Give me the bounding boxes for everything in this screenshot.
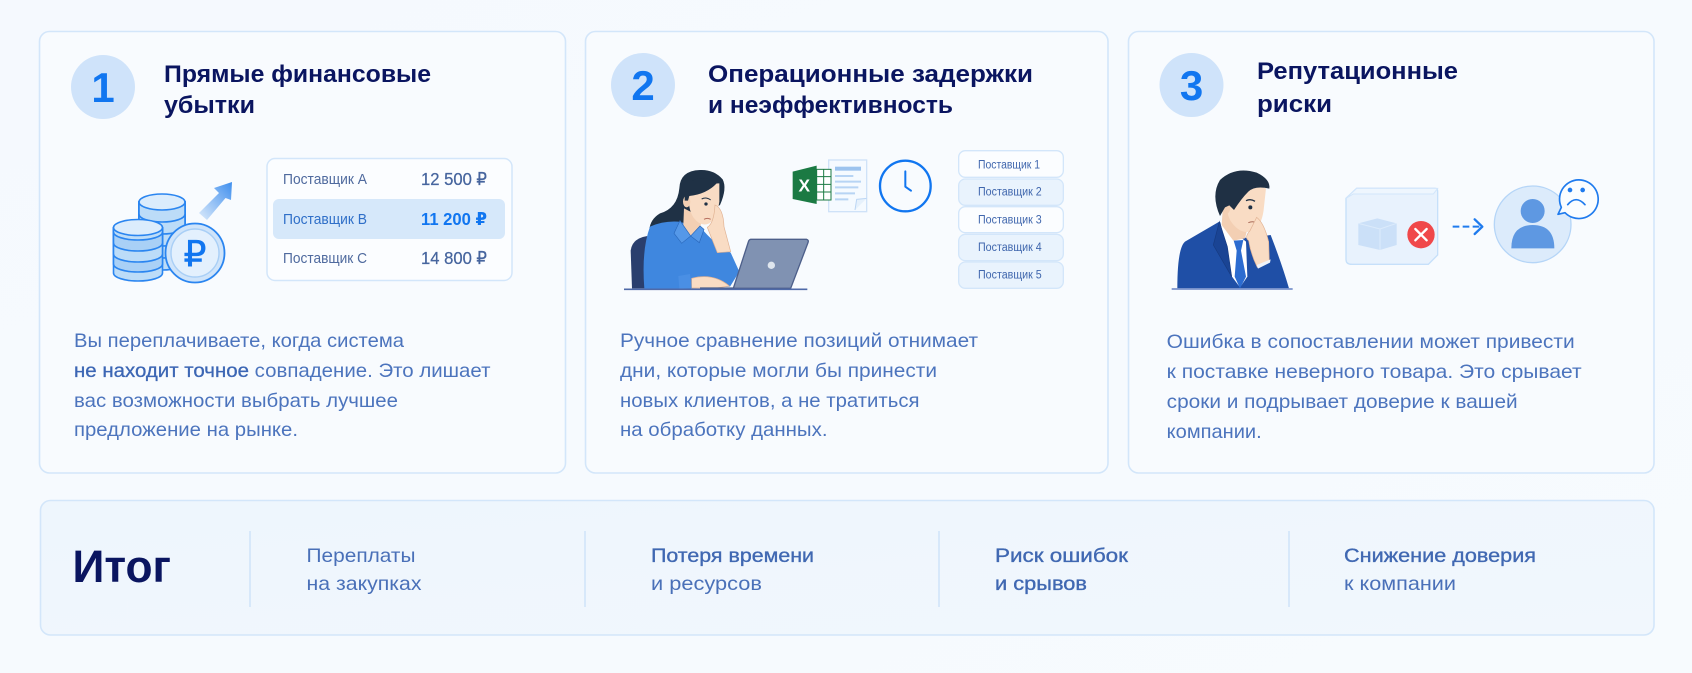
arrow: dashed to customer: [1453, 219, 1482, 234]
body text: operational delays: дни, которые могли бы принести: [620, 360, 937, 382]
summary heading: Итог: [72, 541, 171, 592]
heading: reputational risks: Репутационные: [1257, 58, 1458, 85]
supplier list: Поставщик 4: [978, 240, 1042, 254]
heading: reputational risks: [1257, 58, 1458, 118]
price comparison table: Поставщик A: [283, 172, 367, 188]
summary item: lost time: и ресурсов: [651, 573, 762, 595]
body text: operational delays: на обработку данных.: [620, 419, 828, 441]
price comparison table: Поставщик C: [283, 251, 367, 267]
body text: financial losses: не находит точное совпадение. Это лишает: [74, 360, 491, 382]
supplier list: Поставщик 2: [978, 185, 1042, 199]
icon: spreadsheet and document: X: [799, 175, 811, 195]
icon: coin stacks with ruble and arrow: [114, 182, 232, 282]
supplier list: Поставщик 3: [978, 212, 1042, 226]
body text: operational delays: новых клиентов, а не тратиться: [620, 390, 920, 412]
body text: reputational risks: сроки и подрывает доверие к вашей: [1167, 391, 1518, 413]
number badge 3: 3: [1180, 62, 1203, 109]
number badge 2: [611, 53, 675, 117]
number badge 1: 1: [91, 64, 115, 111]
price comparison table: 11 200 ₽: [421, 209, 487, 229]
summary item: overpayments: Переплаты: [306, 545, 416, 567]
summary item: error risk: и срывов: [995, 573, 1087, 595]
summary item: error risk: Риск ошибок: [995, 545, 1129, 567]
body text: financial losses: вас возможности выбрать лучшее: [74, 390, 398, 412]
heading: financial losses: Прямые финансовые: [164, 61, 431, 88]
summary item: lost time: [651, 545, 814, 595]
body text: reputational risks: [1167, 331, 1582, 443]
body text: operational delays: [620, 330, 978, 441]
summary item: lower trust: [1344, 545, 1536, 595]
heading: financial losses: [164, 61, 431, 119]
icon: clock: [880, 161, 931, 211]
summary item: lower trust: Снижение доверия: [1344, 545, 1536, 567]
icon: unhappy customer: [1494, 180, 1598, 263]
body text: operational delays: Ручное сравнение позиций отнимает: [620, 330, 978, 352]
price comparison table: 12 500 ₽: [421, 169, 487, 189]
panel: reputational risks: [1128, 32, 1654, 473]
illustration: woman at laptop: [624, 170, 808, 289]
number badge 3: [1160, 53, 1224, 117]
heading: operational delays: Операционные задержки: [708, 61, 1033, 88]
number badge 1: [71, 55, 135, 119]
body text: financial losses: Вы переплачиваете, когда система: [74, 330, 404, 352]
panel: financial losses: [40, 32, 566, 473]
body text: financial losses: предложение на рынке.: [74, 419, 298, 441]
summary item: lower trust: к компании: [1344, 573, 1456, 595]
summary item: overpayments: [306, 545, 422, 595]
summary item: overpayments: на закупках: [306, 573, 422, 595]
price comparison table: 14 800 ₽: [421, 248, 487, 268]
heading: operational delays: [708, 61, 1033, 119]
body text: reputational risks: Ошибка в сопоставлении может привести: [1167, 331, 1575, 353]
price comparison table: [267, 158, 512, 280]
panel: operational delays: [586, 32, 1108, 473]
supplier list: [959, 151, 1063, 288]
summary item: lost time: Потеря времени: [651, 545, 814, 567]
heading: reputational risks: риски: [1257, 91, 1332, 118]
icon: coin stacks with ruble and arrow: ₽: [184, 233, 206, 274]
number badge 2: 2: [631, 62, 655, 109]
panel: summary bar: [40, 500, 1654, 635]
supplier list: Поставщик 5: [978, 267, 1042, 281]
icon: wrong product box with error mark: [1346, 188, 1438, 264]
heading: operational delays: и неэффективность: [708, 92, 953, 119]
illustration: worried man in suit: [1172, 171, 1293, 289]
body text: reputational risks: к поставке неверного товара. Это срывает: [1167, 361, 1582, 383]
supplier list: Поставщик 1: [978, 157, 1040, 171]
icon: spreadsheet and document: [793, 160, 867, 212]
summary item: error risk: [995, 545, 1129, 595]
heading: financial losses: убытки: [164, 92, 255, 119]
body text: financial losses: [74, 330, 491, 441]
price comparison table: Поставщик B: [283, 212, 367, 228]
body text: reputational risks: компании.: [1167, 421, 1262, 443]
